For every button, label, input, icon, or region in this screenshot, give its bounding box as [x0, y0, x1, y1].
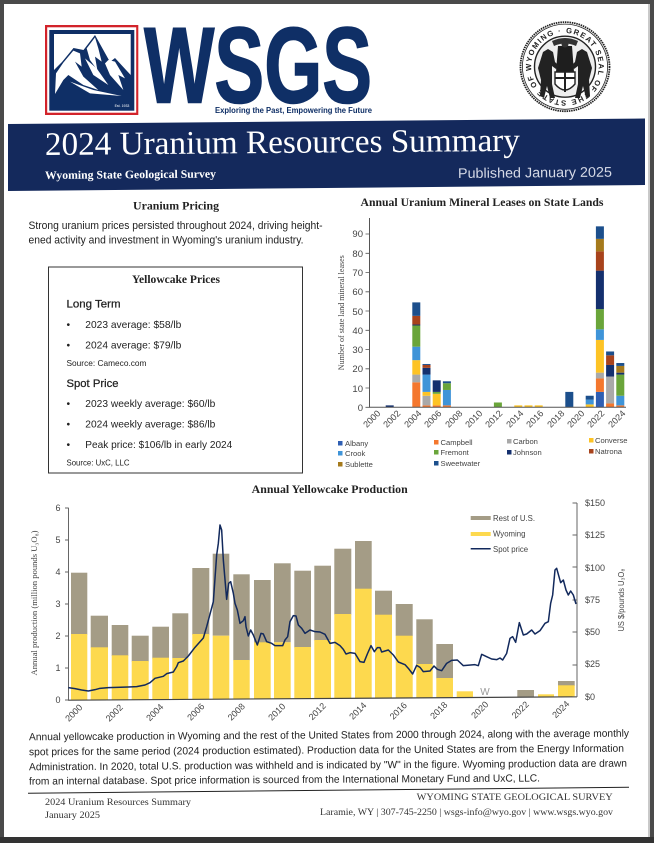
banner title: 2024 Uranium Resources Summary	[45, 123, 521, 163]
footer: report title and date	[45, 798, 191, 821]
spot prices: Source: UxC, LLC	[66, 458, 130, 468]
y axis labels: 90	[352, 229, 363, 240]
legend: Johnson	[513, 448, 542, 457]
left axis labels: 6	[55, 503, 61, 513]
x axis labels: 2010	[463, 408, 484, 430]
spot prices: 2024 weekly average: $86/lb	[85, 420, 216, 430]
text block: uranium pricing intro: Strong uranium prices persisted throughout 2024, driving height-	[28, 220, 323, 232]
long term prices: •	[66, 340, 70, 352]
right axis labels: $150	[585, 498, 605, 508]
y axis labels: 30	[352, 345, 363, 356]
chart legend: Wyoming	[493, 530, 525, 538]
y axis labels	[352, 229, 363, 414]
banner	[8, 118, 645, 191]
x axis labels: 2000	[361, 408, 382, 430]
x axis labels: 2024	[606, 408, 627, 430]
y axis labels: 60	[352, 287, 363, 298]
stacked bars	[386, 226, 624, 407]
left axis title: Annual production (million pounds U₃O₈)	[29, 530, 39, 676]
long term prices: •	[66, 320, 70, 331]
footer: survey contact	[320, 793, 613, 818]
heading: uranium pricing: Uranium Pricing	[133, 198, 219, 212]
x axis labels: 2000	[63, 702, 84, 724]
y axis labels: 10	[352, 384, 363, 395]
Wyoming bars	[71, 589, 575, 702]
footer: report title and date: January 2025	[45, 811, 100, 821]
legend: Converse	[595, 436, 628, 445]
spot prices: •	[66, 399, 70, 410]
right axis labels: $125	[585, 530, 605, 540]
left axis labels: 1	[55, 663, 61, 673]
x axis labels: 2020	[469, 699, 490, 721]
spot price line	[68, 525, 576, 691]
panel: yellowcake prices	[48, 267, 302, 473]
x axis labels: 2016	[388, 700, 409, 722]
x axis labels: 2006	[422, 408, 443, 430]
x axis labels: 2008	[226, 701, 247, 723]
right axis labels	[585, 498, 605, 702]
right axis labels: $25	[585, 659, 600, 669]
text block: production caption: spot prices for the same period (2024 production estimated). Production data for the United States are from the Energy Information	[29, 744, 624, 758]
spot prices	[66, 378, 233, 468]
text block: production caption	[29, 729, 630, 788]
spot prices: •	[66, 440, 70, 451]
text block: production caption: from an internal database. Spot price information is sourced from the International Monetary Fund and UxC, LLC.	[29, 773, 540, 788]
x axis labels: 2020	[565, 408, 586, 430]
y axis title: Number of state land mineral leases	[336, 255, 346, 370]
x axis labels: 2012	[483, 408, 504, 430]
y axis labels: 70	[352, 268, 363, 279]
logo wordmark WSGS: WSGS	[144, 4, 372, 126]
chart legend	[471, 514, 535, 554]
heading: mineral leases chart: Annual Uranium Mineral Leases on State Lands	[360, 197, 604, 209]
banner subtitle: Wyoming State Geological Survey	[45, 169, 216, 182]
chart: annual yellowcake production	[29, 498, 626, 724]
logo: WSGS mountain emblem	[45, 25, 138, 115]
x axis labels: 2012	[307, 701, 328, 722]
text block: uranium pricing intro: ened activity and investment in Wyoming's uranium industry.	[28, 234, 304, 246]
banner publication date: Published January 2025	[458, 164, 612, 181]
x axis labels: 2024	[550, 699, 571, 720]
long term prices	[66, 298, 182, 368]
right axis labels: $100	[585, 563, 605, 573]
y axis labels: 40	[352, 326, 363, 337]
panel heading: Yellowcake Prices	[132, 274, 221, 286]
y axis labels: 0	[358, 403, 363, 414]
left axis labels	[55, 503, 61, 705]
footer: survey contact: Laramie, WY | 307-745-2250 | wsgs-info@wyo.gov | www.wsgs.wyo.gov	[320, 807, 613, 818]
legend: Natrona	[595, 447, 623, 456]
withheld marker: W	[480, 687, 490, 698]
x axis labels	[361, 408, 627, 430]
left axis labels: 3	[55, 599, 61, 609]
x axis labels: 2022	[585, 408, 606, 430]
spot prices: Spot Price	[66, 378, 118, 390]
x axis labels: 2014	[347, 700, 368, 722]
x axis labels	[63, 699, 571, 724]
logo: WSGS mountain emblem: Est. 1933	[115, 104, 129, 108]
chart: annual uranium mineral leases	[336, 218, 628, 469]
legend: Fremont	[440, 448, 470, 457]
x axis labels: 2018	[545, 408, 566, 430]
legend	[338, 436, 628, 469]
legend: Sublette	[345, 460, 373, 469]
right axis labels: $0	[585, 692, 595, 702]
legend: Campbell	[440, 438, 473, 447]
x axis labels: 2010	[266, 701, 287, 723]
x axis labels: 2008	[443, 408, 464, 430]
right axis title: US $/pounds U₃O₈	[617, 568, 626, 632]
chart legend: Spot price	[493, 545, 528, 554]
long term prices: Source: Cameco.com	[66, 358, 147, 368]
long term prices: 2024 average: $79/lb	[85, 340, 182, 352]
left axis labels: 0	[55, 695, 61, 705]
spot prices: •	[66, 420, 70, 430]
icon: Wyoming state seal: GREAT SEAL OF THE STATE OF WYOMING ·	[526, 28, 604, 106]
footer: survey contact: WYOMING STATE GEOLOGICAL SURVEY	[417, 793, 613, 803]
legend: Albany	[345, 439, 368, 448]
y axis labels: 20	[352, 364, 363, 375]
spot prices: 2023 weekly average: $60/lb	[85, 399, 216, 410]
rest of U.S. bars	[71, 541, 575, 698]
right axis labels: $75	[585, 595, 600, 605]
logo tagline: Exploring the Past, Empowering the Future	[215, 106, 373, 115]
long term prices: Long Term	[66, 298, 120, 310]
legend: Sweetwater	[440, 459, 481, 468]
x axis labels: 2014	[504, 408, 525, 430]
y axis labels: 50	[352, 307, 363, 318]
heading: yellowcake production chart: Annual Yellowcake Production	[252, 484, 408, 496]
chart legend: Rest of U.S.	[493, 514, 535, 523]
left axis labels: 4	[55, 567, 61, 577]
text block: production caption: Administration. In 2020, total U.S. production was withheld and is indicated by "W" in the figure. Wyoming production data are drawn	[29, 759, 627, 773]
x axis labels: 2006	[185, 701, 206, 723]
text block: production caption: Annual yellowcake production in Wyoming and the rest of the United States from 2000 through 2024, along with the average monthly	[29, 729, 630, 743]
left axis labels: 5	[55, 535, 61, 545]
x axis labels: 2016	[524, 408, 545, 430]
long term prices: 2023 average: $58/lb	[85, 320, 182, 331]
x axis labels: 2022	[510, 699, 531, 721]
legend: Carbon	[513, 437, 538, 446]
x axis labels: 2018	[428, 700, 449, 721]
legend: Crook	[345, 449, 365, 458]
right axis labels: $50	[585, 627, 600, 637]
y axis labels: 80	[352, 249, 363, 260]
x axis labels: 2002	[104, 702, 125, 724]
x axis labels: 2004	[144, 702, 165, 723]
spot prices: Peak price: $106/lb in early 2024	[85, 440, 233, 451]
x axis labels: 2002	[381, 408, 402, 430]
text block: uranium pricing intro	[28, 220, 323, 246]
x axis labels: 2004	[402, 408, 423, 430]
left axis labels: 2	[55, 631, 61, 641]
footer: report title and date: 2024 Uranium Resources Summary	[45, 798, 191, 808]
